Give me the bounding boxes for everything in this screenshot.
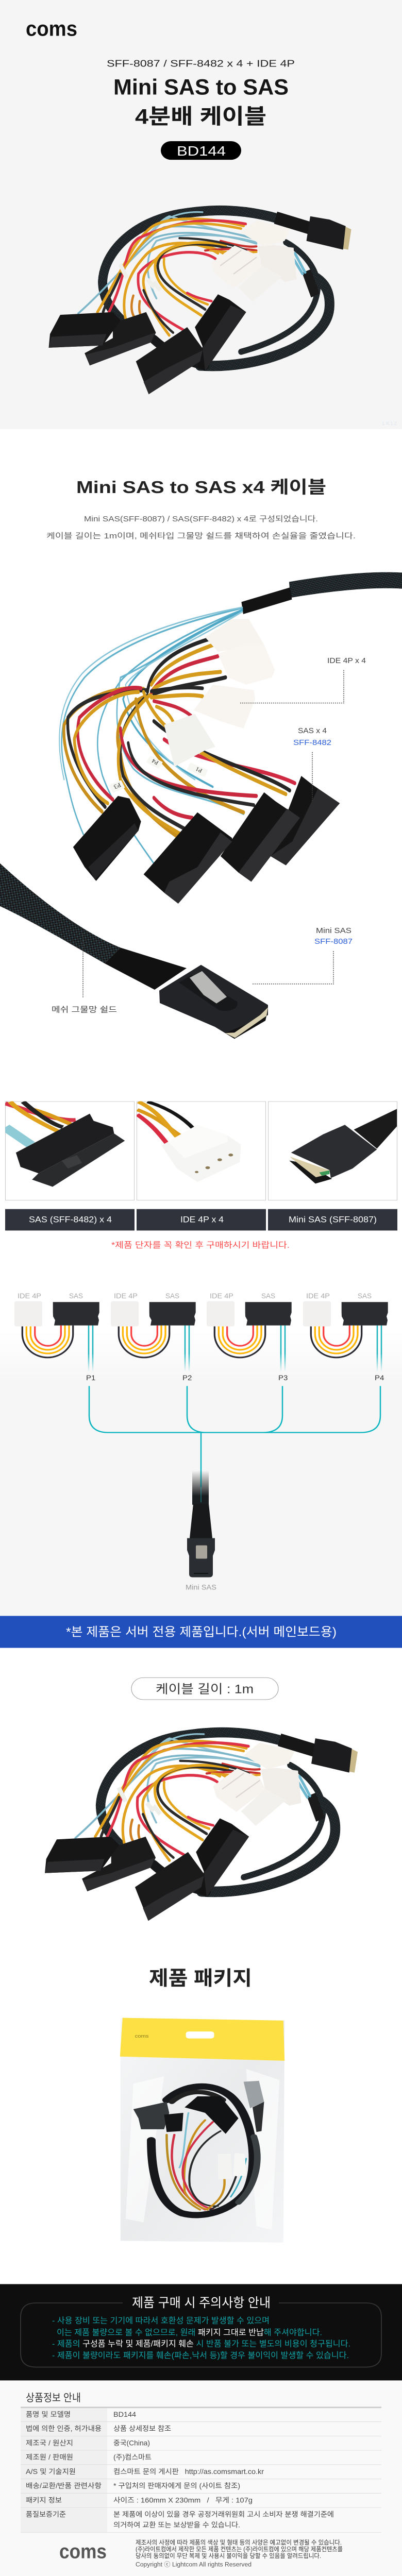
info table: 제조원 / 판매원 — [26, 2453, 73, 2462]
mini SAS plug — [187, 1470, 215, 1577]
label bar: Mini SAS: Mini SAS (SFF-8087) — [289, 1214, 377, 1225]
info table — [21, 2406, 381, 2532]
mesh sleeve and mini SAS plug — [0, 863, 268, 1039]
label bar: Mini SAS — [268, 1209, 397, 1230]
product photo: package: coms — [135, 2033, 149, 2039]
intro text: 케이블 길이는 1m이며, 메쉬타입 그물망 쉴드를 채택하여 손실율을 줄였습니다. — [46, 532, 356, 540]
teal bus — [89, 1386, 380, 1487]
port labels: P3 — [278, 1375, 288, 1382]
model badge: BD144 — [177, 144, 226, 159]
info table: BD144 — [113, 2411, 136, 2419]
cable tag: P3: P3 — [112, 782, 122, 790]
caution frame — [21, 2303, 381, 2367]
branch 4 — [303, 1292, 388, 1371]
label bar: IDE: IDE 4P x 4 — [180, 1214, 224, 1225]
info table: 컴스마트 문의 게시판 http://as.comsmart.co.kr — [113, 2467, 264, 2476]
branch 1: SAS — [69, 1292, 83, 1300]
label bar: IDE — [137, 1209, 266, 1230]
heading: Mini SAS x4: Mini SAS to SAS x4 케이블 — [76, 478, 326, 497]
info heading: 상품정보 안내 — [26, 2392, 81, 2404]
cable tag: P3 — [109, 780, 125, 793]
intro text: Mini SAS(SFF-8087) / SAS(SFF-8482) x 4로 구성되었습니다. — [84, 514, 318, 523]
callout: Mini SAS: SFF-8087 — [314, 938, 353, 946]
info table: 본 제품에 이상이 있을 경우 공정거래위원회 고시 소비자 분쟁 해결기준에 — [113, 2511, 334, 2519]
product photo: cable — [49, 210, 351, 394]
product photo: package — [120, 2018, 284, 2243]
info table: (주)컴스마트 — [113, 2453, 152, 2462]
caution line 1: - 사용 장비 또는 기기에 따라서 호환성 문제가 발생할 수 있으며 — [52, 2316, 270, 2325]
footer legal text — [136, 2539, 343, 2568]
label bar: SAS: SAS (SFF-8482) x 4 — [29, 1214, 112, 1225]
info table: 배송/교환/반품 관련사항 — [26, 2482, 102, 2490]
callout: IDE 4P x 4 — [240, 656, 366, 703]
wiring diagram — [0, 1292, 402, 1616]
watermark: LK12 — [382, 421, 397, 427]
panel: product information — [0, 2380, 402, 2576]
product photo: cable length — [45, 1733, 358, 1921]
footer logo: coms — [59, 2540, 107, 2563]
subtitle: SFF-8087 / SFF-8482 x 4 + IDE 4P — [107, 59, 295, 69]
callout: SAS x 4: SFF-8482 — [293, 739, 331, 747]
caution line 3: - 제품의 구성품 누락 및 제품/패키지 훼손 시 반품 불가 또는 별도의 비용이 청구됩니다. — [52, 2340, 350, 2349]
caution line 2: 이는 제품 불량으로 볼 수 없으므로, 원래 패키지 그대로 반납해 주셔야합니다. — [57, 2328, 322, 2337]
panel: hero — [0, 0, 402, 429]
port labels: P4 — [375, 1375, 384, 1382]
info table: 패키지 정보 — [26, 2496, 62, 2504]
caution title: 제품 구매 시 주의사항 안내 — [132, 2295, 271, 2310]
cable tag: P1 — [187, 762, 208, 777]
info table: 품질보증기준 — [26, 2511, 66, 2519]
logo: coms: coms — [26, 17, 77, 40]
footer legal text: 제조사의 사정에 따라 제품의 색상 및 형태 등의 사양은 예고없이 변경될 수 있습니다. — [136, 2539, 342, 2546]
info table: 의거하여 교환 또는 보상받을 수 있습니다. — [113, 2521, 240, 2529]
title line 2: 4분배 케이블 — [135, 105, 266, 128]
panel: SAS connector photo — [5, 1101, 135, 1200]
warning note: *제품 단자를 꼭 확인 후 구매하시기 바랍니다. — [111, 1241, 290, 1250]
cable tag: P4 — [146, 755, 163, 769]
cable length pill — [131, 1677, 278, 1700]
notice band: *본 제품은 서버 전용 제품입니다.(서버 메인보드용) — [66, 1625, 337, 1639]
info table: 중국(China) — [113, 2439, 150, 2447]
info table: 품명 및 모델명 — [26, 2410, 71, 2419]
callout: SAS x 4 — [293, 726, 331, 801]
info table: 제조국 / 원산지 — [26, 2439, 73, 2447]
title line 1: Mini SAS to SAS — [113, 75, 289, 99]
product photo: connectors close-up — [0, 580, 402, 1039]
intro text — [46, 514, 356, 540]
branch 1: IDE 4P — [18, 1292, 41, 1300]
cable tag: P1: P1 — [194, 766, 204, 774]
branch 1 — [14, 1292, 99, 1371]
callout: IDE 4P x 4: IDE 4P x 4 — [327, 656, 366, 665]
cable tag: P4: P4 — [150, 757, 160, 766]
heading: package: 제품 패키지 — [149, 1967, 252, 1990]
panel: IDE connector photo — [137, 1101, 266, 1200]
info table: * 구입처의 판매자에게 문의 (사이트 참조) — [113, 2482, 240, 2490]
info table: 법에 의한 인증, 허가내용 — [26, 2425, 102, 2433]
notice band — [0, 1616, 402, 1648]
footer legal text: (주)라이트컴에서 제작한 모든 제품 컨텐츠는 (주)라이트컴에 있으며 해당 제품컨텐츠를 — [136, 2546, 343, 2553]
branch 3 — [207, 1292, 292, 1371]
mini SAS label: Mini SAS — [186, 1584, 216, 1591]
port labels: P2 — [182, 1375, 192, 1382]
model badge — [161, 141, 241, 160]
cable length pill: 케이블 길이 : 1m — [156, 1682, 254, 1696]
callout: mesh shield: 메쉬 그물망 쉴드 — [52, 1005, 117, 1014]
footer legal text: Copyright ⓒ Lightcom All rights Reserved — [136, 2561, 252, 2568]
callout: SAS x 4: SAS x 4 — [298, 726, 327, 735]
footer legal text: 당사의 동의없이 무단 복제 및 사용시 불이익을 당할 수 있음을 알려드립니다. — [136, 2552, 321, 2560]
panel: Mini SAS connector photo — [268, 1101, 397, 1200]
info table: 상품 상세정보 참조 — [113, 2425, 171, 2433]
callout: Mini SAS: Mini SAS — [316, 926, 351, 935]
info table: 사이즈 : 160mm X 230mm / 무게 : 107g — [113, 2496, 253, 2504]
label bar: SAS — [5, 1209, 135, 1230]
port labels: P1 — [86, 1375, 95, 1382]
info table: A/S 및 기술지원 — [26, 2467, 76, 2476]
caution line 4: - 제품이 불량이라도 패키지를 훼손(파손,낙서 등)할 경우 불이익이 발생할 수 있습니다. — [52, 2351, 349, 2360]
branch 2 — [111, 1292, 196, 1371]
port labels — [86, 1375, 384, 1382]
panel: purchase cautions — [0, 2284, 402, 2380]
callout: Mini SAS — [253, 926, 353, 984]
